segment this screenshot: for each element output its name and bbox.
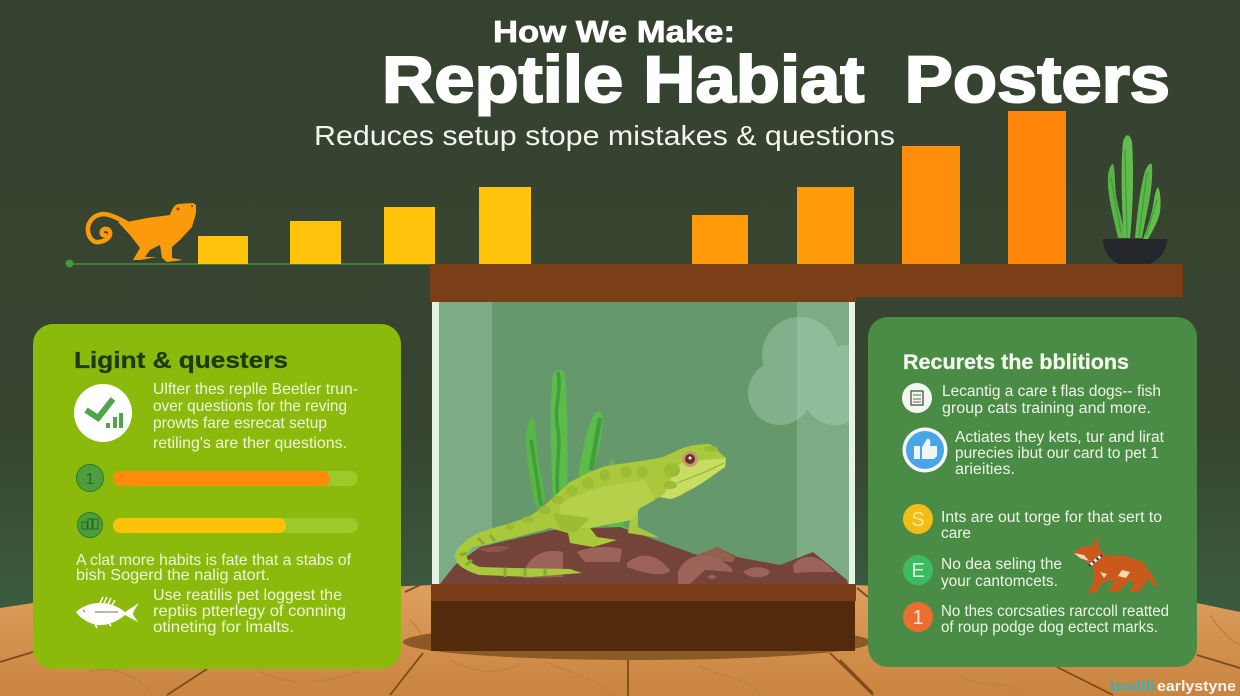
left panel note: bish Sogerd the nalig atort. (76, 567, 270, 584)
glass edges (432, 302, 855, 584)
bar chart: rising yellow and orange bars on a timeline (66, 111, 1066, 268)
tank shadow on floor (403, 624, 871, 660)
glass back wall (432, 302, 855, 585)
watermark: bodili (1110, 678, 1155, 695)
right panel item 2 text (955, 429, 1165, 478)
left panel intro text (153, 381, 358, 452)
glass side reflections (439, 302, 849, 585)
icon: white fish (76, 597, 139, 628)
icon: orange chameleon silhouette (88, 203, 196, 262)
left panel intro text: Ulfter thes replle Beetler trun- (153, 381, 358, 398)
title (382, 14, 1170, 116)
right panel item 5 text: of roup podge dog ectect marks. (941, 619, 1158, 636)
title: How We Make: (493, 14, 735, 49)
right panel item 4 text: your cantomcets. (941, 573, 1058, 590)
left panel tip text: Use reatilis pet loggest the (153, 587, 342, 604)
progress bar 1 (76, 464, 358, 492)
lizard (455, 444, 726, 577)
badge 1 (903, 602, 933, 632)
terrarium tank with lizard (430, 297, 870, 651)
badge S: S (911, 509, 925, 531)
tank top rim (430, 297, 856, 302)
badge S (903, 504, 933, 534)
soil and rocks (440, 527, 848, 584)
wooden floor (0, 585, 1240, 696)
right panel item 3 text: care (941, 525, 971, 542)
tank base (431, 584, 856, 601)
left panel tip text (153, 587, 346, 636)
left panel intro text: retiling's are ther questions. (153, 435, 347, 452)
shelf (430, 264, 1183, 297)
tank plant (526, 370, 626, 530)
right panel item 3 text (941, 509, 1162, 542)
watermark: earlystyne (1157, 678, 1236, 695)
progress bar 1: 1 (86, 471, 95, 488)
right panel heading: Recurets the bblitions (903, 351, 1129, 374)
icon: clipboard (902, 383, 932, 413)
right panel item 2 text: Actiates they kets, tur and lirat (955, 429, 1165, 446)
subtitle: Reduces setup stope mistakes & questions (314, 120, 895, 151)
right panel item 4 text: No dea seling the (941, 556, 1062, 573)
icon: thumbs up (902, 428, 948, 472)
left panel intro text: over questions for the reving (153, 398, 347, 415)
badge 1: 1 (912, 607, 924, 629)
icon: potted plant on shelf (1103, 135, 1167, 264)
panel: right resources (868, 317, 1197, 667)
left panel note: A clat more habits is fate that a stabs of (76, 552, 352, 569)
left panel tip text: otineting for lmalts. (153, 619, 294, 636)
right panel item 5 text: No thes corcsaties rarccoll reatted (941, 603, 1169, 620)
right panel item 2 text: purecies ibut our card to pet 1 (955, 445, 1159, 462)
progress bar 2 (78, 512, 358, 538)
right panel item 1 text: Lecantig a care ŧ flas dogs-- fish (942, 383, 1161, 400)
left panel note (76, 552, 352, 584)
left panel intro text: prowts fare esrecat setup (153, 415, 327, 432)
title: Reptile Habiat Posters (382, 42, 1170, 116)
badge E: E (911, 560, 925, 582)
right panel item 4 text (941, 556, 1062, 590)
icon: orange dog (1073, 537, 1158, 593)
left panel heading: Ligint & questers (74, 347, 288, 373)
right panel item 1 text: group cats training and more. (942, 400, 1151, 417)
right panel item 3 text: Ints are out torge for that sert to (941, 509, 1162, 526)
watermark (1110, 678, 1236, 695)
left panel tip text: reptiis ptterlegy of conning (153, 603, 346, 620)
right panel item 1 text (942, 383, 1161, 417)
cloud decal (748, 317, 849, 425)
right panel item 5 text (941, 603, 1169, 636)
icon: check mark with bars (74, 384, 132, 442)
right panel item 2 text: arieities. (955, 461, 1015, 478)
panel: left lighting and questions (33, 324, 401, 669)
badge E (903, 555, 933, 585)
